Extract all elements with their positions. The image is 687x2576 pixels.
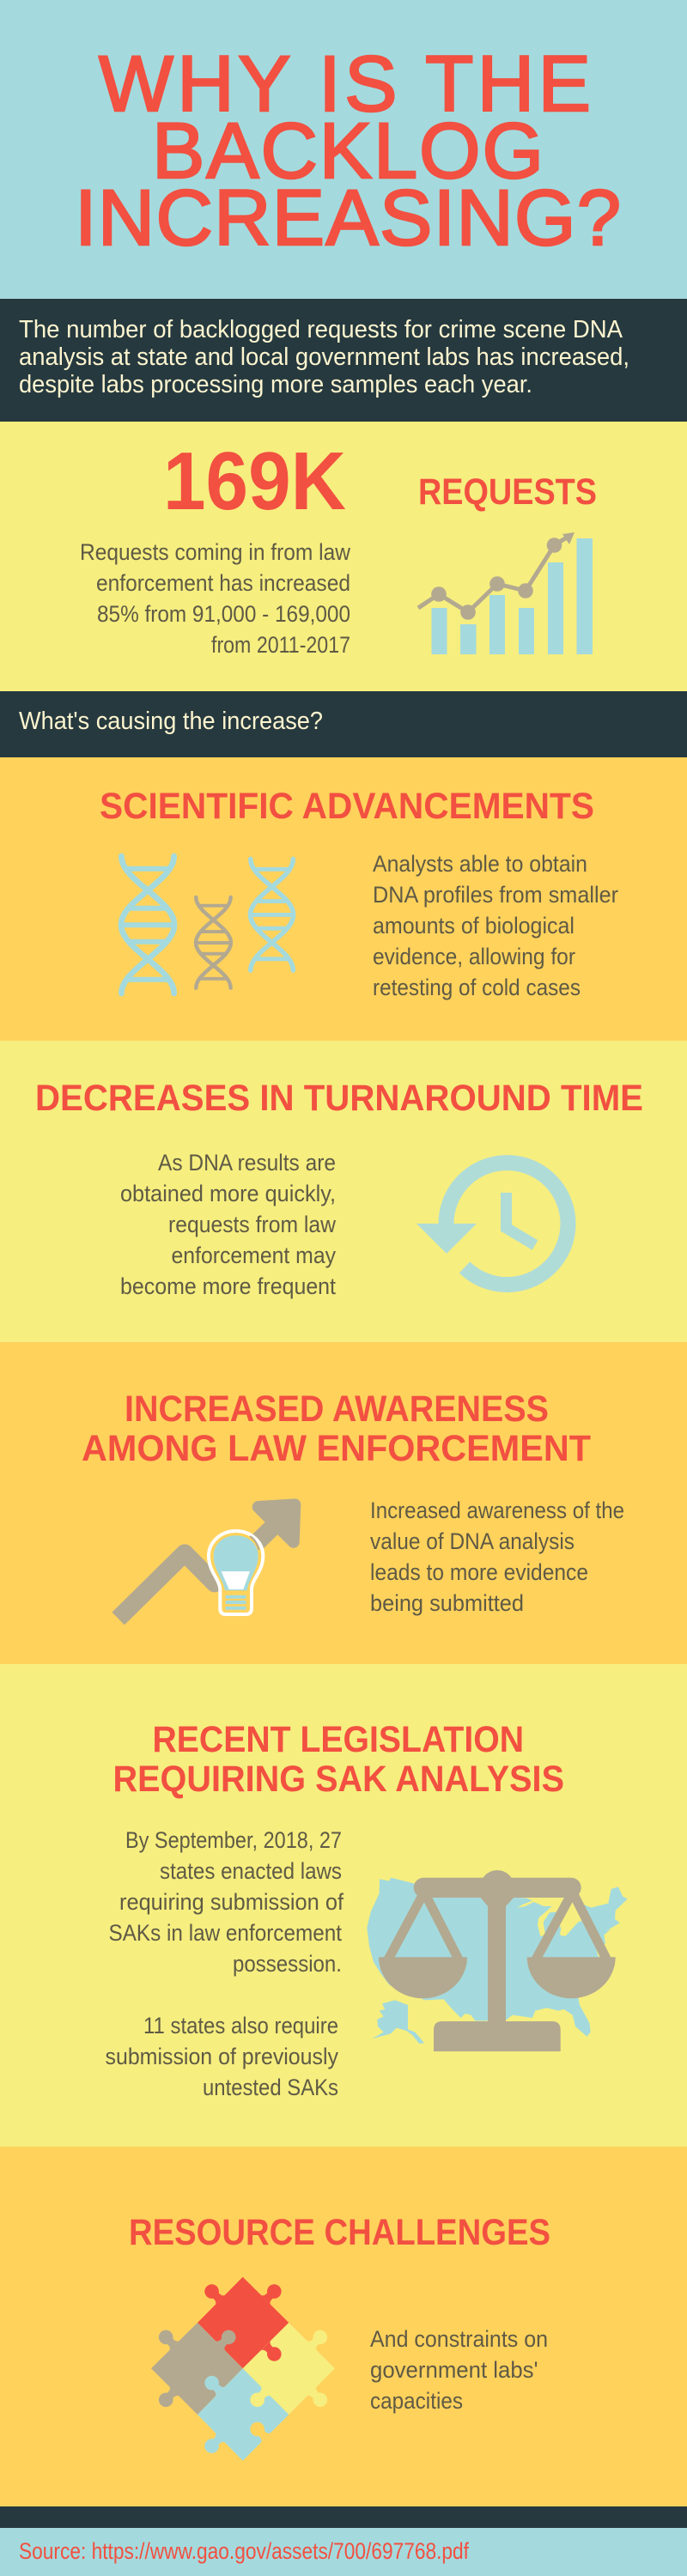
text: untested SAKs bbox=[105, 2013, 339, 2100]
text: legislation enacted bbox=[108, 1827, 344, 1977]
intro text: despite labs processing more samples each year. bbox=[19, 371, 532, 398]
panel: scientific advancements bbox=[0, 757, 687, 1041]
requests description: from 2011-2017 bbox=[211, 632, 350, 658]
text: resource challenges bbox=[370, 2326, 548, 2414]
text: untested SAKs: untested SAKs bbox=[203, 2075, 338, 2100]
icon: rising arrow and light bulb bbox=[119, 1504, 295, 1619]
text: scientific advancements: DNA profiles from smaller bbox=[373, 882, 618, 908]
panel: footer band bbox=[0, 2506, 687, 2528]
text: scientific advancements: Analysts able to obtain bbox=[373, 851, 587, 877]
heading: decreases in turnaround time: DECREASES IN TURNAROUND TIME bbox=[35, 1078, 643, 1119]
causes heading: What's causing the increase? bbox=[19, 708, 323, 735]
panel: source bbox=[0, 2528, 687, 2576]
text: increased awareness: being submitted bbox=[370, 1590, 524, 1616]
requests description: Requests coming in from law bbox=[80, 539, 351, 565]
panel: recent legislation bbox=[0, 1664, 687, 2147]
text: legislation enacted: SAKs in law enforcement bbox=[108, 1920, 343, 1946]
text: increased awareness: value of DNA analysis bbox=[370, 1528, 575, 1554]
text: turnaround time: As DNA results are bbox=[158, 1150, 336, 1176]
heading: recent legislation: REQUIRING SAK ANALYSIS bbox=[113, 1759, 564, 1800]
panel: decreases in turnaround time bbox=[0, 1041, 687, 1342]
heading: scientific advancements: SCIENTIFIC ADVANCEMENTS bbox=[100, 786, 594, 827]
source citation: Source: https://www.gao.gov/assets/700/697768.pdf bbox=[19, 2538, 470, 2564]
text: legislation enacted: requiring submission of bbox=[119, 1889, 344, 1915]
heading: recent legislation bbox=[113, 1719, 564, 1800]
title bbox=[75, 40, 621, 262]
requests description: 85% from 91,000 - 169,000 bbox=[97, 601, 350, 627]
heading: recent legislation: RECENT LEGISLATION bbox=[153, 1719, 524, 1760]
icon: DNA helices bbox=[121, 856, 294, 993]
requests description bbox=[80, 539, 351, 658]
panel: introduction bbox=[0, 299, 687, 422]
panel: resource challenges bbox=[0, 2147, 687, 2506]
title: INCREASING? bbox=[75, 174, 621, 262]
text: legislation enacted: By September, 2018, 27 bbox=[125, 1827, 342, 1853]
text: turnaround time: become more frequent bbox=[120, 1273, 337, 1299]
text: scientific advancements: amounts of biological bbox=[373, 913, 575, 939]
text: increased awareness: leads to more evidence bbox=[370, 1559, 588, 1585]
text: legislation enacted: possession. bbox=[233, 1951, 342, 1977]
text: resource challenges: capacities bbox=[370, 2388, 463, 2414]
icon: US map with scales of justice bbox=[367, 1870, 628, 2051]
text: legislation enacted: states enacted laws bbox=[160, 1858, 342, 1884]
intro text: The number of backlogged requests for crime scene DNA bbox=[19, 316, 623, 343]
panel: increased awareness bbox=[0, 1342, 687, 1664]
heading: increased awareness: AMONG LAW ENFORCEMENT bbox=[82, 1428, 591, 1469]
text: turnaround time: obtained more quickly, bbox=[120, 1181, 336, 1206]
requests label: REQUESTS bbox=[418, 471, 597, 513]
big number: 169K bbox=[163, 435, 346, 527]
heading: resource challenges: RESOURCE CHALLENGES bbox=[129, 2212, 550, 2253]
requests description: enforcement has increased bbox=[96, 570, 350, 596]
heading: increased awareness bbox=[82, 1388, 591, 1469]
heading: increased awareness: INCREASED AWARENESS bbox=[125, 1388, 549, 1430]
text: resource challenges: And constraints on bbox=[370, 2326, 548, 2352]
text: turnaround time bbox=[120, 1150, 337, 1299]
text: turnaround time: enforcement may bbox=[172, 1242, 337, 1268]
title: BACKLOG bbox=[152, 107, 544, 195]
intro text: analysis at state and local government labs has increased, bbox=[19, 343, 629, 371]
text: untested SAKs: 11 states also require bbox=[143, 2013, 338, 2038]
text: scientific advancements: retesting of cold cases bbox=[373, 975, 581, 1000]
text: increased awareness bbox=[370, 1498, 624, 1616]
text: scientific advancements: evidence, allowing for bbox=[373, 944, 575, 969]
icon: clock with reverse arrow bbox=[416, 1163, 568, 1285]
icon: bar and line chart bbox=[418, 532, 593, 654]
text: increased awareness: Increased awareness of the bbox=[370, 1498, 624, 1523]
text: turnaround time: requests from law bbox=[168, 1212, 337, 1237]
panel: title bbox=[0, 0, 687, 299]
text: scientific advancements bbox=[373, 851, 618, 1000]
panel: causes header bbox=[0, 691, 687, 757]
intro text bbox=[19, 316, 629, 398]
title: WHY IS THE bbox=[99, 40, 591, 128]
text: resource challenges: government labs' bbox=[370, 2357, 538, 2383]
text: untested SAKs: submission of previously bbox=[105, 2044, 339, 2069]
panel: requests statistic bbox=[0, 422, 687, 691]
icon: puzzle pieces bbox=[151, 2277, 335, 2461]
